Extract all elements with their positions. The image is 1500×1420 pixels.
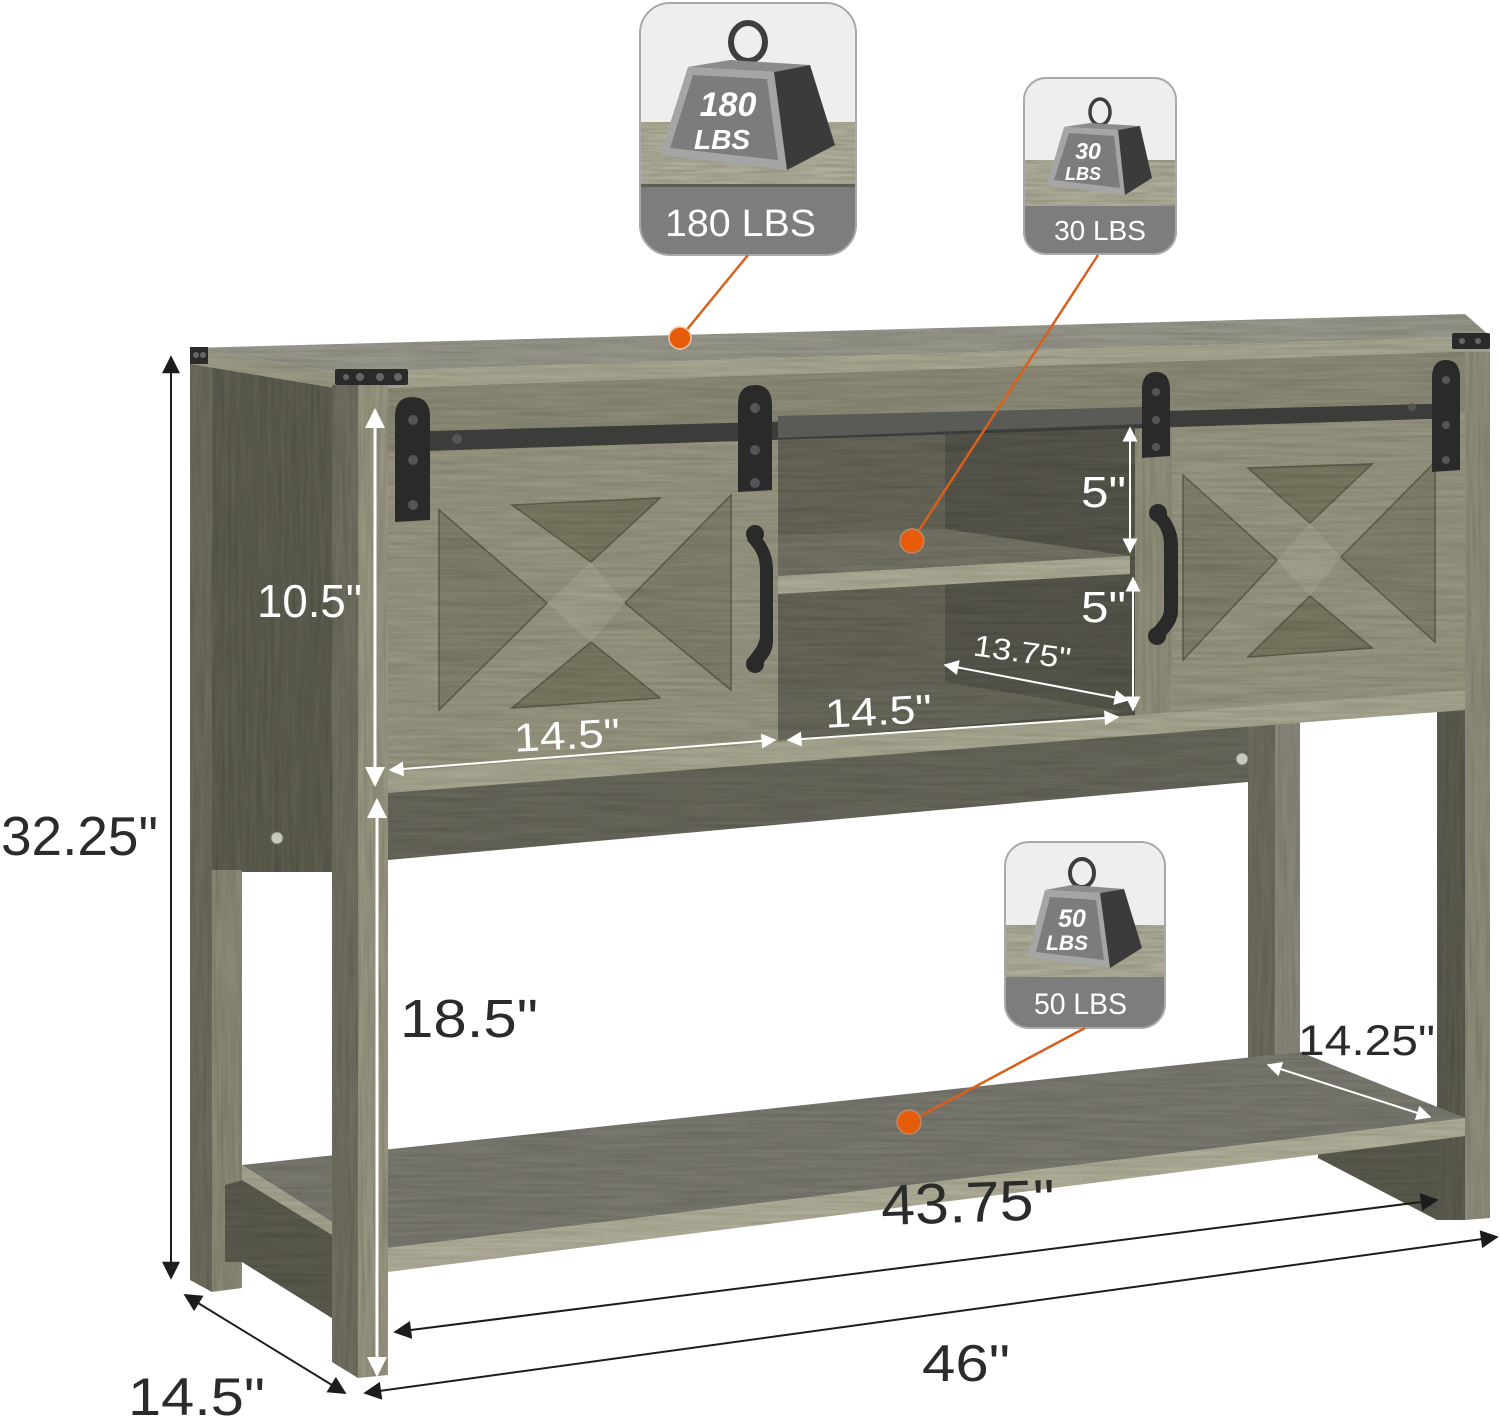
back right leg bbox=[1248, 716, 1300, 1095]
cabinet front panel bbox=[388, 350, 1465, 775]
weight icon: 50: LBS bbox=[1046, 932, 1088, 955]
badge label: 30 LBS bbox=[1054, 215, 1146, 246]
lower left stretcher bbox=[225, 1180, 335, 1320]
hanger bolts bbox=[408, 376, 1450, 510]
rear structure: legs and side panel bbox=[190, 345, 1490, 1292]
hanger 2 bbox=[738, 385, 772, 492]
bottom shelf bbox=[242, 1052, 1465, 1248]
console table bbox=[190, 314, 1490, 1378]
left handle bbox=[746, 525, 773, 673]
front left leg bbox=[332, 385, 388, 1378]
badge: 30 LBS shelf capacity bbox=[1024, 78, 1176, 254]
bottom rail of cabinet bbox=[388, 690, 1465, 793]
dimension labels: white: 14.5" bbox=[824, 687, 933, 737]
cubby floor bbox=[778, 682, 1125, 740]
top left side edge bbox=[190, 348, 335, 388]
bottom shelf edge bbox=[388, 1118, 1465, 1272]
hanger 3 bbox=[1142, 372, 1170, 458]
badge label: 50 LBS bbox=[1034, 988, 1127, 1021]
badge label: 180 LBS bbox=[665, 203, 816, 245]
dimension labels: white: 14.5" bbox=[513, 711, 621, 761]
right front leg bbox=[1437, 345, 1490, 1220]
weight icon: 30: LBS bbox=[1065, 164, 1101, 184]
dimension labels: white: 5" bbox=[1081, 468, 1126, 517]
callout lines and dots bbox=[669, 255, 1098, 1134]
bracket rivets bbox=[193, 338, 1481, 381]
cubby shelf edge bbox=[778, 556, 1130, 594]
back left leg bbox=[190, 362, 242, 1292]
corner bracket right bbox=[1452, 333, 1490, 349]
dimension labels: dark bbox=[1, 805, 1435, 1420]
weight icon: 180: 180 bbox=[700, 86, 756, 124]
weight icon: 30 bbox=[1047, 99, 1152, 195]
sliding rail bbox=[395, 403, 1460, 452]
corner bracket front left bbox=[335, 369, 408, 385]
dimension labels: white: 5" bbox=[1081, 583, 1126, 632]
white inner dimension arrows bbox=[375, 410, 1430, 1375]
apron under cabinet bbox=[388, 716, 1248, 860]
black outer dimension arrows bbox=[171, 357, 1497, 1393]
dimension labels: dark: 46" bbox=[922, 1335, 1010, 1393]
hanger 4 bbox=[1432, 360, 1460, 472]
divider next to right door bbox=[1135, 428, 1172, 715]
dimension labels: white: 13.75" bbox=[971, 630, 1073, 676]
front wood structure bbox=[332, 385, 1172, 1378]
top front lip bbox=[335, 336, 1490, 388]
badge: 180 LBS top capacity bbox=[640, 3, 856, 257]
dimension labels: dark: 14.25" bbox=[1298, 1017, 1435, 1065]
right handle bbox=[1148, 504, 1178, 645]
left side panel bbox=[190, 362, 335, 872]
dimension labels: dark: 18.5" bbox=[400, 989, 538, 1049]
door hardware bbox=[190, 333, 1490, 673]
dimension labels: dark: 43.75" bbox=[880, 1168, 1056, 1238]
weight icon: 50: 50 bbox=[1058, 905, 1086, 933]
left door bbox=[388, 436, 778, 772]
main wood structure bbox=[190, 314, 1490, 1320]
weight icon: 180: LBS bbox=[694, 124, 750, 155]
hanger 1 bbox=[395, 397, 430, 522]
centre cubby bbox=[778, 425, 1135, 740]
screw caps bbox=[271, 753, 1248, 844]
weight icon: 180 bbox=[660, 23, 835, 170]
corner bracket back left bbox=[190, 347, 208, 364]
table top surface bbox=[190, 314, 1490, 372]
right door bbox=[1170, 410, 1465, 712]
dimension labels: white: 10.5" bbox=[257, 575, 362, 627]
cubby shelf top bbox=[778, 529, 1130, 576]
lower right stretcher bbox=[1318, 1130, 1437, 1220]
dimension labels: white bbox=[257, 468, 1126, 761]
weight icon: 30: 30 bbox=[1075, 138, 1101, 164]
weight icon: 50 bbox=[1027, 859, 1142, 968]
badge: 50 LBS bottom shelf capacity bbox=[1005, 842, 1165, 1028]
dimension labels: dark: 32.25" bbox=[1, 805, 158, 867]
